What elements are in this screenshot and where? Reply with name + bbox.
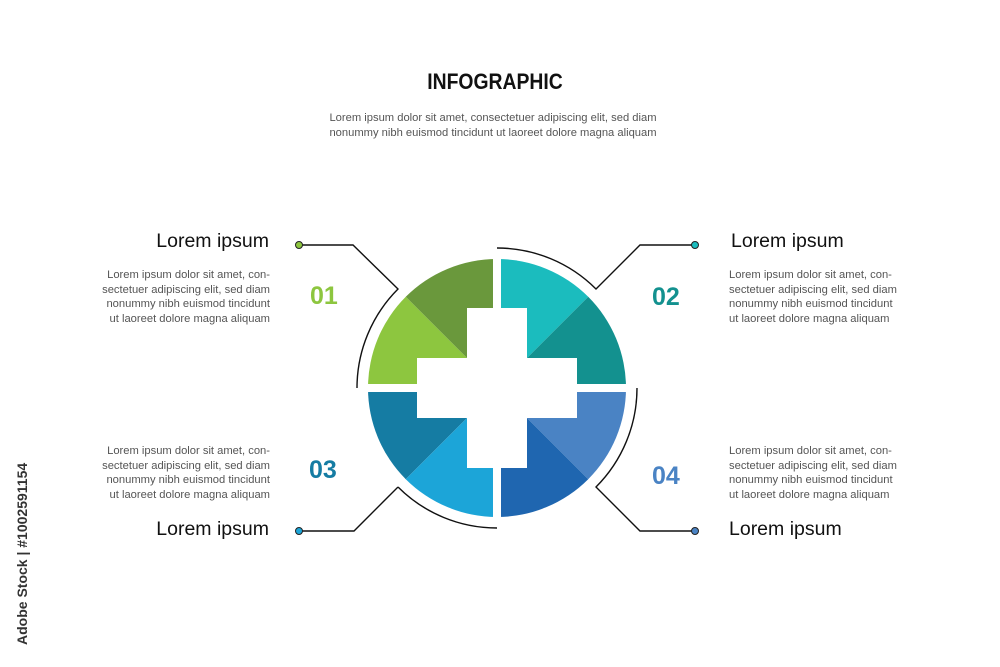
diagram [295, 241, 699, 535]
dots [296, 242, 698, 534]
block 4: sectetuer adipiscing elit, sed diam [729, 460, 897, 472]
quadrants [368, 259, 626, 517]
text: 03 [309, 456, 337, 484]
block 3: Lorem ipsum dolor sit amet, con- [107, 445, 270, 457]
block 4: ut laoreet dolore magna aliquam [729, 489, 889, 501]
text: sectetuer adipiscing elit, sed diam [102, 284, 270, 296]
block 2: Lorem ipsum [731, 230, 844, 252]
numbers: 01 [310, 282, 338, 310]
text: Lorem ipsum dolor sit amet, con- [729, 269, 892, 281]
text: nonummy nibh euismod tincidunt [729, 298, 893, 310]
watermark id: Adobe Stock | #1002591154 [14, 463, 30, 645]
block 3 [102, 445, 270, 501]
subtitle: nonummy nibh euismod tincidunt ut laoreet dolore magna aliquam [329, 127, 657, 139]
block 3: ut laoreet dolore magna aliquam [110, 489, 270, 501]
block 3: sectetuer adipiscing elit, sed diam [102, 460, 270, 472]
text: Lorem ipsum [156, 518, 269, 540]
text: ut laoreet dolore magna aliquam [110, 313, 270, 325]
text: nonummy nibh euismod tincidunt [106, 298, 270, 310]
white cross and gaps [360, 250, 640, 530]
text: sectetuer adipiscing elit, sed diam [729, 284, 897, 296]
text: Lorem ipsum dolor sit amet, con- [107, 269, 270, 281]
block 1: Lorem ipsum [156, 230, 269, 252]
text: 04 [652, 462, 680, 490]
block 4: Lorem ipsum dolor sit amet, con- [729, 445, 892, 457]
block 3: nonummy nibh euismod tincidunt [106, 474, 270, 486]
text: 02 [652, 283, 680, 311]
connectors [300, 245, 694, 531]
text: ut laoreet dolore magna aliquam [729, 313, 889, 325]
subtitle [329, 112, 657, 139]
subtitle: Lorem ipsum dolor sit amet, consectetuer adipiscing elit, sed diam [329, 112, 657, 124]
block 4 [729, 445, 897, 501]
text: Lorem ipsum [729, 518, 842, 540]
block 4: nonummy nibh euismod tincidunt [729, 474, 893, 486]
title: INFOGRAPHIC [427, 69, 563, 94]
